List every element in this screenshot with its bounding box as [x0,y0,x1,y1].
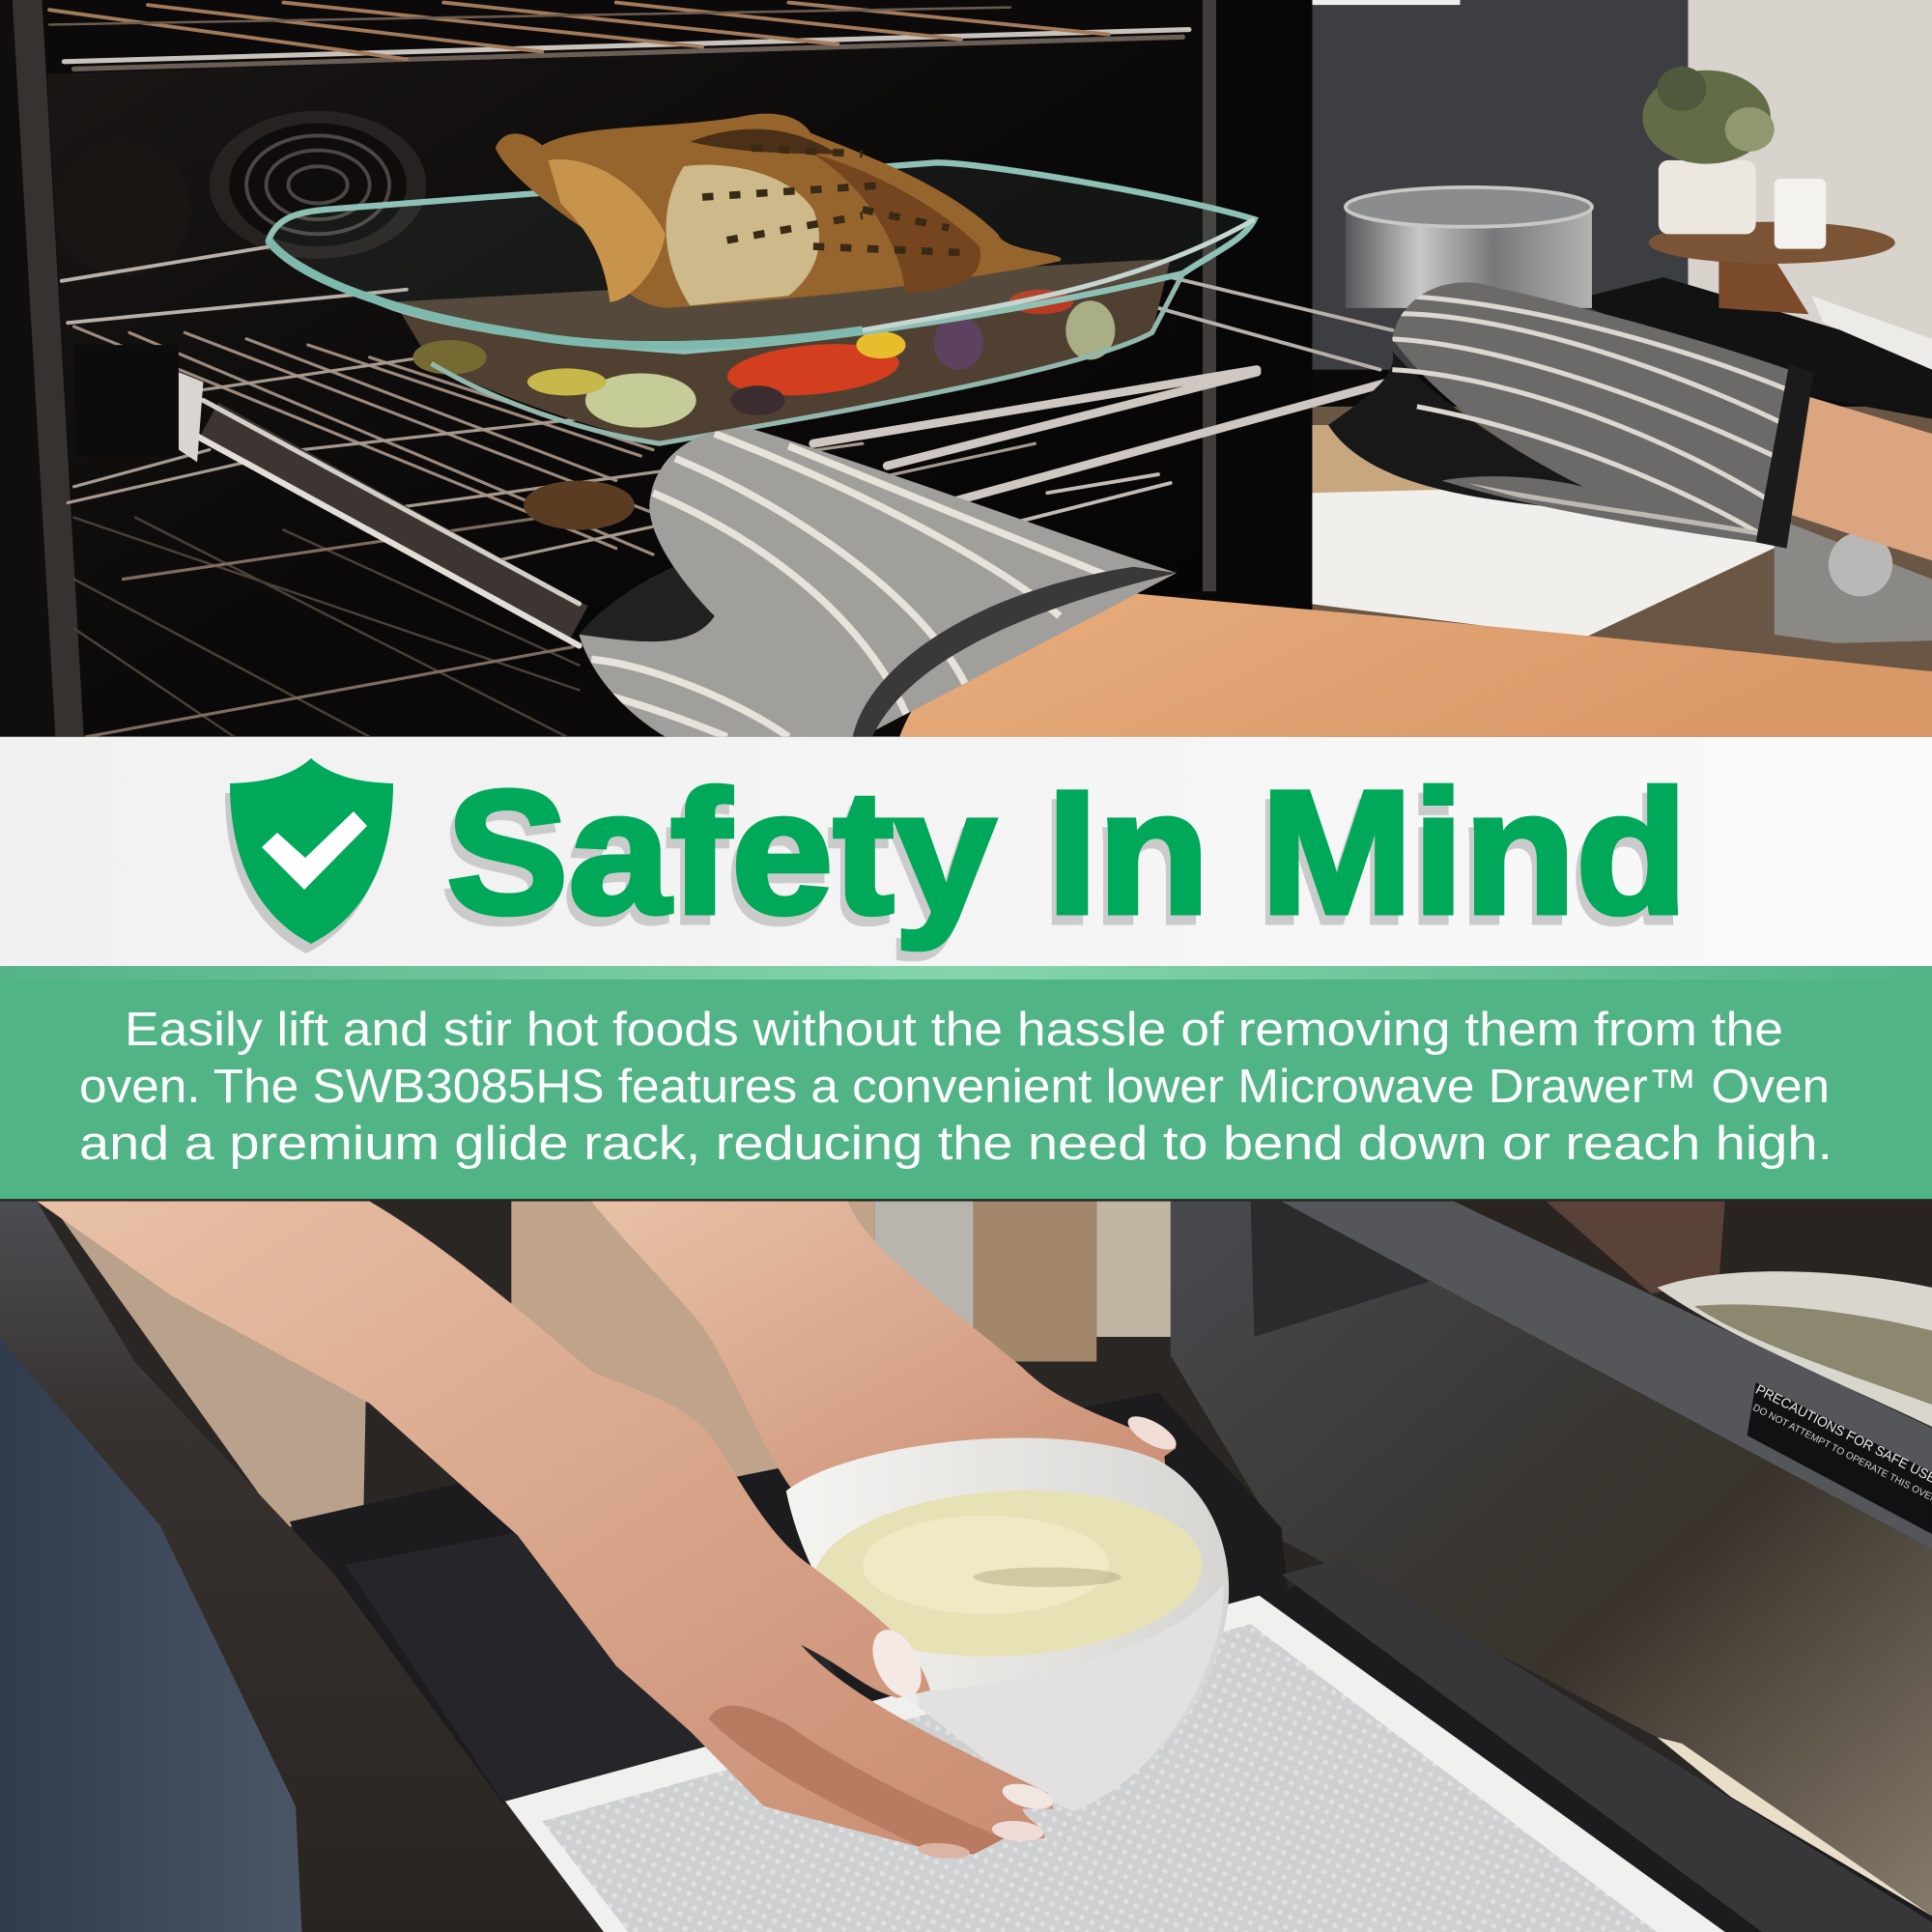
glass dish with vegetables [269,162,1254,443]
description text: and a premium glide rack, reducing the need to bend down or reach high. [79,1118,1833,1170]
drawer tray [290,1392,1932,1932]
title text: Safety In Mind [441,763,1683,960]
lower racks [62,246,1399,737]
microwave body [1171,1202,1932,1932]
kitchen background [1310,0,1932,737]
oven mitt: right [1328,282,1814,549]
soup bowl [786,1437,1229,1811]
photo: oven with roast chicken [0,0,1932,737]
description text [79,1004,1833,1170]
oven interior [0,0,1312,737]
description band [0,966,1932,1200]
roast chicken [496,114,1061,308]
drawer front frame [0,1202,503,1932]
lower hand [37,1202,1181,1861]
right arm [1791,397,1932,560]
upper oven rack [49,3,1189,69]
upper hand [591,1202,1177,1516]
pot [1346,187,1592,308]
oven mitt: left [579,429,1177,737]
plant and wooden stand [1642,67,1895,314]
description text: oven. The SWB3085HS features a convenient lower Microwave Drawer™ Oven [79,1061,1830,1113]
glass dish front rim [269,219,1254,443]
left arm [899,591,1932,737]
title text: Safety In Mind [446,753,1688,951]
description text: Easily lift and stir hot foods without the hassle of removing them from the [125,1004,1783,1056]
icon: shield with check mark [225,758,393,953]
title band [0,737,1932,966]
background kitchen [0,1199,1932,1932]
photo: microwave drawer with soup bowl [0,1199,1932,1932]
